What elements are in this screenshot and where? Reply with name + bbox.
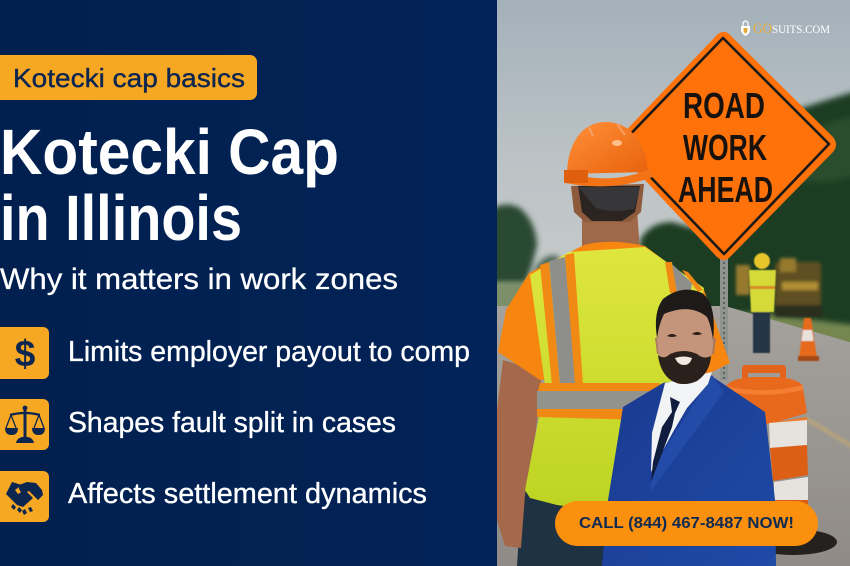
traffic barrel bbox=[725, 365, 837, 555]
vest horizontal bands bbox=[538, 383, 660, 391]
traffic cone bbox=[798, 318, 819, 361]
icon: balance scales bbox=[0, 399, 49, 450]
attorney portrait bbox=[602, 290, 776, 566]
list item: limits employer payout: Limits employer payout to comp bbox=[68, 336, 470, 368]
ears and head bbox=[571, 184, 644, 222]
shirt bbox=[651, 372, 712, 472]
hair bbox=[578, 186, 640, 221]
list item: shapes fault split bbox=[0, 399, 396, 450]
eyes bbox=[667, 332, 702, 337]
road work ahead sign: AHEAD bbox=[678, 169, 773, 210]
right lapel bbox=[650, 375, 724, 492]
sign post bbox=[720, 255, 728, 380]
icon: handshake bbox=[0, 471, 49, 522]
background scenery: trees, grass and road bbox=[490, 90, 850, 566]
hard hat bbox=[564, 122, 653, 186]
tag: Kotecki cap basics bbox=[0, 55, 257, 100]
logo: GoSuits.com: GO bbox=[753, 21, 772, 37]
hi-vis vest bbox=[525, 247, 704, 520]
list item: affects settlement bbox=[0, 471, 427, 522]
beard bbox=[658, 351, 711, 384]
road worker bbox=[497, 122, 730, 566]
list item: shapes fault split: Shapes fault split in cases bbox=[68, 407, 396, 439]
hat strap bbox=[578, 187, 640, 211]
road work ahead sign: ROAD bbox=[683, 85, 765, 126]
neck bbox=[582, 215, 640, 246]
jeans bbox=[517, 491, 604, 566]
ears bbox=[655, 338, 716, 354]
background worker bbox=[749, 253, 776, 353]
background machinery bbox=[736, 258, 822, 317]
road work ahead sign: WORK bbox=[683, 127, 767, 168]
sky bbox=[497, 0, 850, 286]
icon: dollar sign: $ bbox=[15, 333, 36, 374]
title: Kotecki Cap bbox=[0, 116, 339, 188]
vest left stripes bbox=[540, 262, 560, 385]
title: in Illinois bbox=[0, 182, 242, 254]
list item: limits employer payout bbox=[0, 327, 470, 379]
logo: GoSuits.com bbox=[741, 21, 830, 37]
hair bbox=[656, 290, 714, 340]
list item: affects settlement: Affects settlement dynamics bbox=[68, 478, 427, 510]
subtitle: Why it matters in work zones bbox=[0, 263, 398, 296]
icon: dollar sign bbox=[0, 327, 49, 379]
suit bbox=[602, 375, 776, 566]
neck and face bbox=[656, 309, 714, 384]
vest right stripes bbox=[665, 262, 677, 293]
left arm bbox=[497, 360, 542, 548]
title bbox=[0, 116, 339, 254]
logo: GoSuits.com: SUITS.COM bbox=[772, 22, 830, 36]
road work ahead sign bbox=[612, 32, 836, 260]
tie bbox=[651, 397, 680, 482]
tag: Kotecki cap basics: Kotecki cap basics bbox=[13, 63, 245, 93]
orange shirt bbox=[498, 242, 730, 380]
panel: road work photo bbox=[490, 0, 850, 566]
panel: navy left background bbox=[0, 0, 497, 566]
call to action button: CALL (844) 467-8487 NOW! bbox=[579, 515, 794, 532]
icon: lock bbox=[741, 21, 750, 36]
call to action button bbox=[555, 501, 818, 546]
